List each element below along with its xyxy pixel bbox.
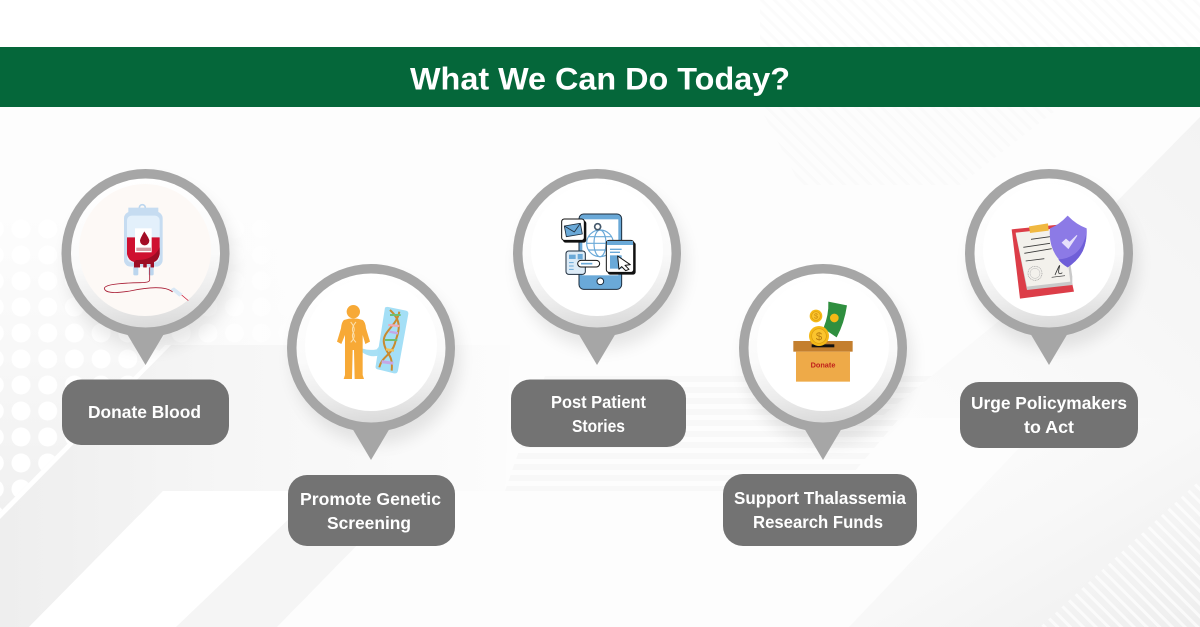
icon: phone with social cards <box>562 214 636 289</box>
icon background <box>757 279 889 411</box>
label <box>960 382 1138 448</box>
icon background <box>983 184 1115 316</box>
panel: urge policymakers to act <box>960 169 1138 448</box>
label <box>723 474 917 546</box>
icon background <box>531 184 663 316</box>
label <box>62 380 229 445</box>
label: Support Thalassemia <box>734 488 906 508</box>
label: Urge Policymakers <box>971 393 1127 413</box>
pin marker <box>62 169 234 365</box>
pin marker <box>739 264 912 460</box>
header banner <box>0 47 1200 107</box>
label: Promote Genetic <box>300 489 441 509</box>
pin marker <box>287 264 460 460</box>
icon: blood bag <box>104 205 188 301</box>
panel: post patient stories <box>511 169 686 447</box>
panel: donate blood <box>62 169 234 445</box>
icon: donation box: Donate <box>811 361 835 370</box>
icon: clipboard and shield <box>1012 216 1087 299</box>
icon: donation box: $ <box>816 331 823 343</box>
panel: promote genetic screening <box>287 264 460 546</box>
label: Research Funds <box>753 512 883 532</box>
pin marker <box>513 169 686 365</box>
icon: person and dna <box>337 305 408 379</box>
panel: support thalassemia research funds <box>723 264 917 546</box>
label <box>288 475 455 546</box>
label: Screening <box>327 513 411 533</box>
label: Stories <box>572 416 625 436</box>
icon: donation box <box>793 302 853 382</box>
icon background <box>305 279 437 411</box>
label: Donate Blood <box>88 402 201 422</box>
title: What We Can Do Today? <box>410 60 790 96</box>
pin marker <box>965 169 1138 365</box>
label: to Act <box>1024 417 1074 437</box>
label <box>511 380 686 447</box>
label: Post Patient <box>551 392 646 412</box>
icon: donation box: $ <box>814 312 818 321</box>
icon background <box>79 184 211 316</box>
